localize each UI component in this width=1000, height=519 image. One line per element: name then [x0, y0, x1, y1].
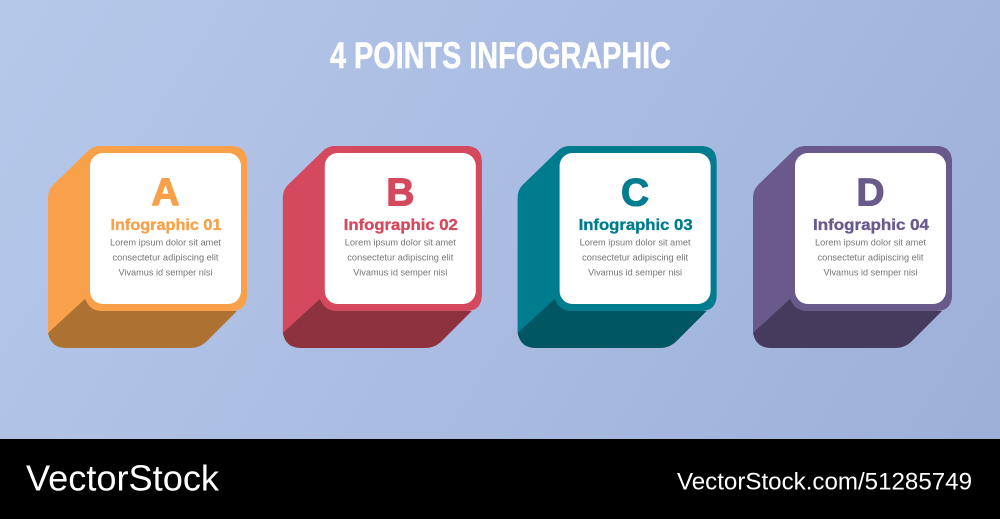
inner panel A: [90, 153, 241, 304]
body text D: Lorem ipsum dolor sit amet: [815, 237, 927, 247]
body text A: Vivamus id semper nisi: [118, 267, 212, 277]
letter B: B: [386, 172, 414, 214]
bottom face C: [518, 299, 707, 348]
body text B: Lorem ipsum dolor sit amet: [345, 237, 456, 247]
inner panel C: [560, 153, 711, 304]
body text C: Vivamus id semper nisi: [588, 267, 682, 277]
letter D: D: [856, 172, 885, 214]
footer logo: VectorStock: [26, 458, 220, 498]
body text D: consectetur adipiscing elit: [818, 252, 924, 262]
body text D: Vivamus id semper nisi: [824, 267, 918, 277]
body text A: Lorem ipsum dolor sit amet: [110, 237, 222, 247]
bottom face D: [753, 299, 942, 348]
body text B: consectetur adipiscing elit: [347, 252, 454, 262]
heading C: Infographic 03: [579, 217, 693, 234]
title: 4 POINTS INFOGRAPHIC: [330, 35, 671, 76]
side face C: [518, 146, 717, 333]
frame C: [555, 146, 717, 311]
side face B: [283, 146, 482, 333]
footer bar: [0, 439, 1000, 519]
bottom face A: [48, 299, 237, 348]
body text B: [345, 237, 456, 277]
panel: card B: [283, 146, 482, 348]
body text D: [815, 237, 927, 277]
body text C: [580, 237, 691, 277]
inner panel D: [795, 153, 946, 304]
panel: card D: [753, 146, 952, 348]
letter C: C: [621, 172, 649, 214]
heading A: Infographic 01: [110, 217, 222, 234]
letter A: A: [151, 172, 180, 214]
heading B: Infographic 02: [344, 217, 458, 234]
heading D: Infographic 04: [813, 217, 929, 234]
bottom face B: [283, 299, 472, 348]
frame D: [790, 146, 952, 311]
panel: card A: [48, 146, 247, 348]
footer url: VectorStock.com/51285749: [677, 468, 972, 496]
side face A: [48, 146, 247, 333]
side face D: [753, 146, 952, 333]
frame B: [320, 146, 482, 311]
body text C: consectetur adipiscing elit: [582, 252, 689, 262]
inner panel B: [325, 153, 476, 304]
frame A: [85, 146, 247, 311]
body text A: consectetur adipiscing elit: [112, 252, 219, 262]
panel: card C: [518, 146, 717, 348]
body text B: Vivamus id semper nisi: [353, 267, 447, 277]
body text A: [110, 237, 222, 277]
body text C: Lorem ipsum dolor sit amet: [580, 237, 691, 247]
